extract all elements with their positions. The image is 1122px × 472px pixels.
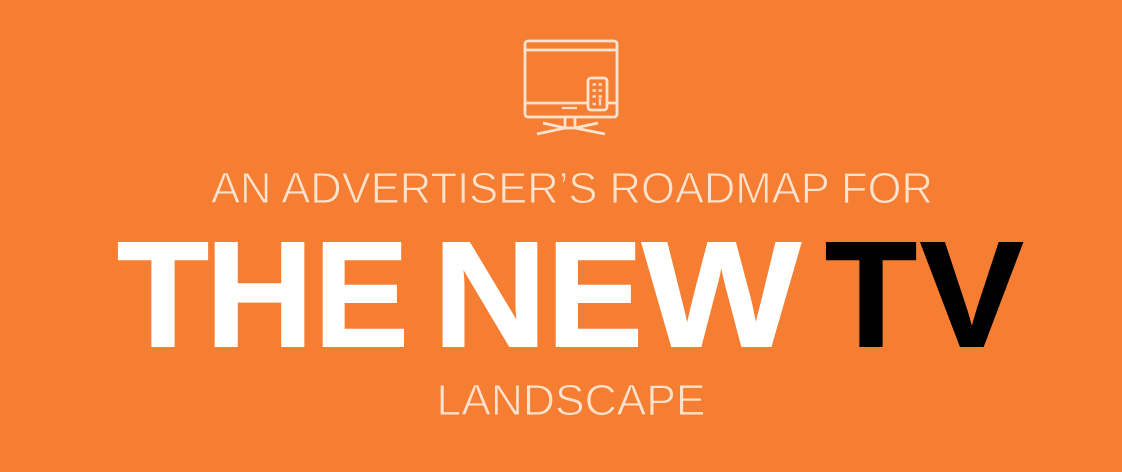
title words: the new: N (433, 210, 547, 378)
title words: the new: T (117, 210, 209, 378)
title words: the new (117, 210, 801, 378)
title words: the new: E (314, 210, 409, 378)
title words: the new: E (547, 210, 643, 378)
title words: the new: W (642, 210, 801, 378)
subtitle line: an advertiser's roadmap for: AN ADVERTISER’S ROADMAP FOR (211, 165, 933, 213)
title word: tv (825, 210, 1023, 378)
main title (117, 210, 1023, 378)
title words: the new: H (205, 210, 314, 378)
title word: tv: T (825, 210, 917, 378)
icon: television with remote control (525, 41, 617, 134)
subtitle line: landscape: LANDSCAPE (436, 377, 706, 425)
title word: tv: V (920, 210, 1023, 378)
